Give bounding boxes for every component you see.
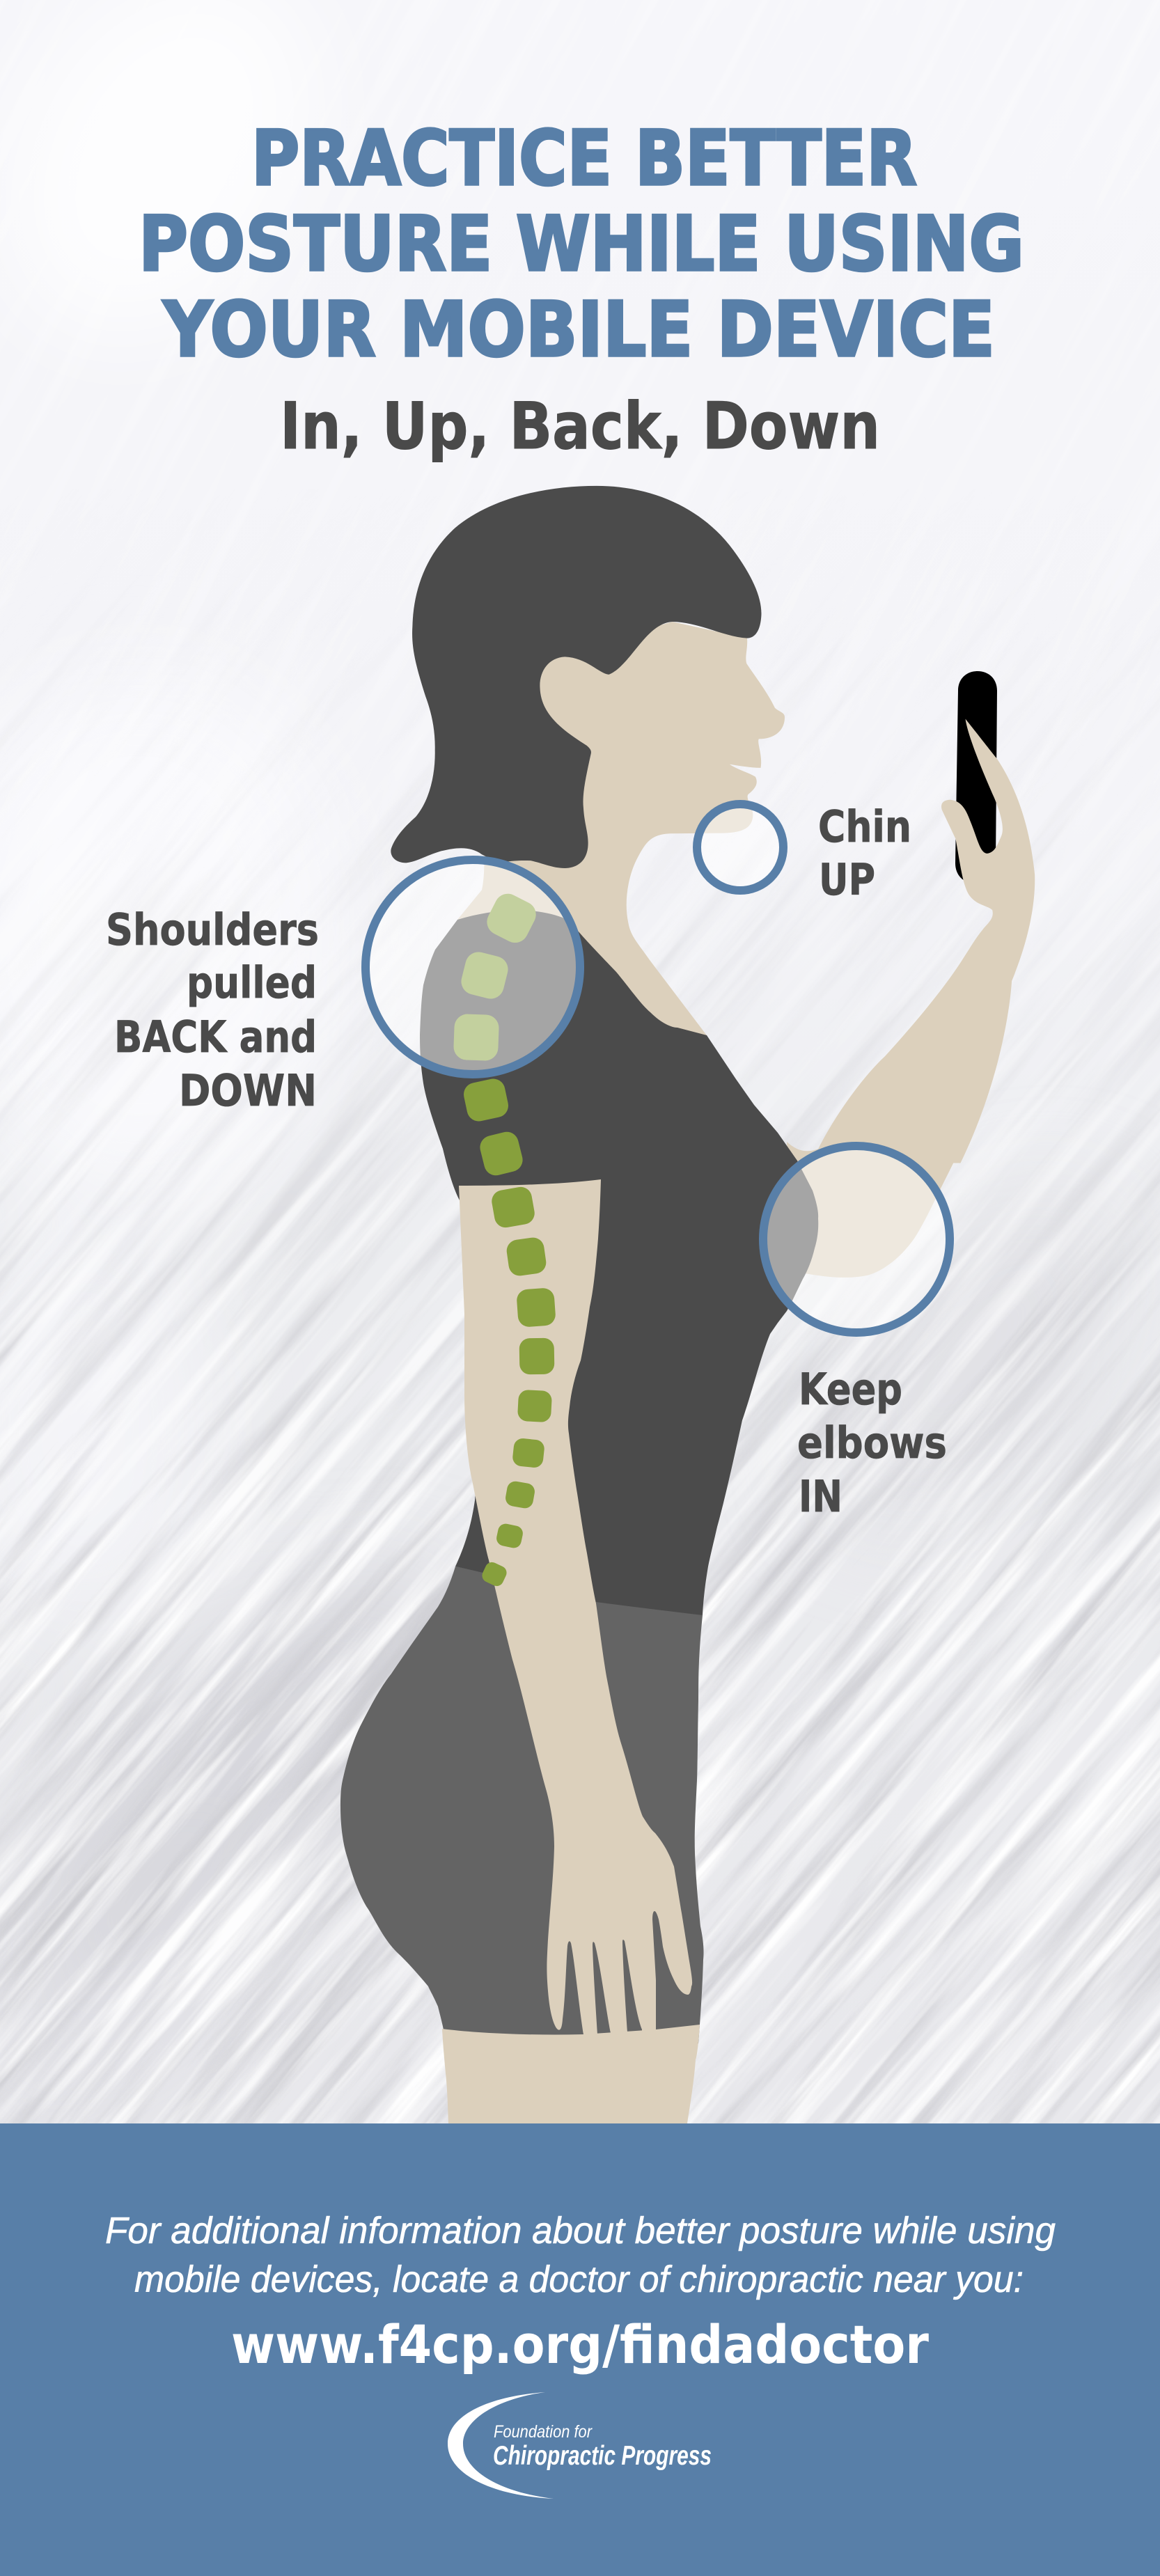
head, neck and shoulder skin <box>457 622 785 1052</box>
logo: Foundation for Chiropractic Progress: Chiropractic Progress <box>493 2441 712 2471</box>
illustration: woman holding a phone in correct posture <box>340 486 1035 2123</box>
footer panel <box>0 2123 1160 2576</box>
hanging arm and thigh <box>442 1179 700 2123</box>
callout: shoulders: pulled <box>187 957 317 1008</box>
callout: shoulders: DOWN <box>179 1065 317 1116</box>
title: YOUR MOBILE DEVICE <box>162 285 995 374</box>
callout: shoulders <box>106 904 319 1116</box>
callout: elbows <box>797 1364 947 1522</box>
callout: elbows: elbows <box>797 1417 947 1468</box>
shorts <box>340 1566 704 2043</box>
callout: chin up: Chin <box>818 801 911 852</box>
subtitle: In, Up, Back, Down <box>280 388 880 464</box>
footer url: www.f4cp.org/findadoctor <box>231 2314 929 2375</box>
title: PRACTICE BETTER <box>251 114 917 203</box>
logo: Foundation for Chiropractic Progress: Foundation for <box>494 2422 593 2442</box>
raised arm and hand <box>787 719 1035 1278</box>
spine vertebrae <box>453 889 556 1588</box>
highlight circle: elbow <box>763 1146 950 1333</box>
callout: chin up: UP <box>819 854 875 905</box>
callout: shoulders: BACK and <box>114 1012 317 1062</box>
callout: elbows: Keep <box>799 1364 902 1415</box>
callout: shoulders: Shoulders <box>106 904 319 955</box>
footer text: mobile devices, locate a doctor of chiropractic near you: <box>134 2259 1024 2300</box>
highlight circle: shoulders <box>366 860 580 1074</box>
logo: Foundation for Chiropractic Progress <box>448 2392 712 2499</box>
footer text <box>105 2210 1056 2300</box>
title <box>139 114 1024 374</box>
callout: chin up <box>818 801 911 905</box>
callout: elbows: IN <box>799 1471 842 1522</box>
hair <box>391 486 761 868</box>
title: POSTURE WHILE USING <box>139 200 1024 288</box>
highlight circle: chin <box>697 804 783 890</box>
icon: mobile phone <box>955 671 997 883</box>
footer text: For additional information about better posture while using <box>105 2210 1056 2252</box>
shirt <box>420 910 818 1615</box>
